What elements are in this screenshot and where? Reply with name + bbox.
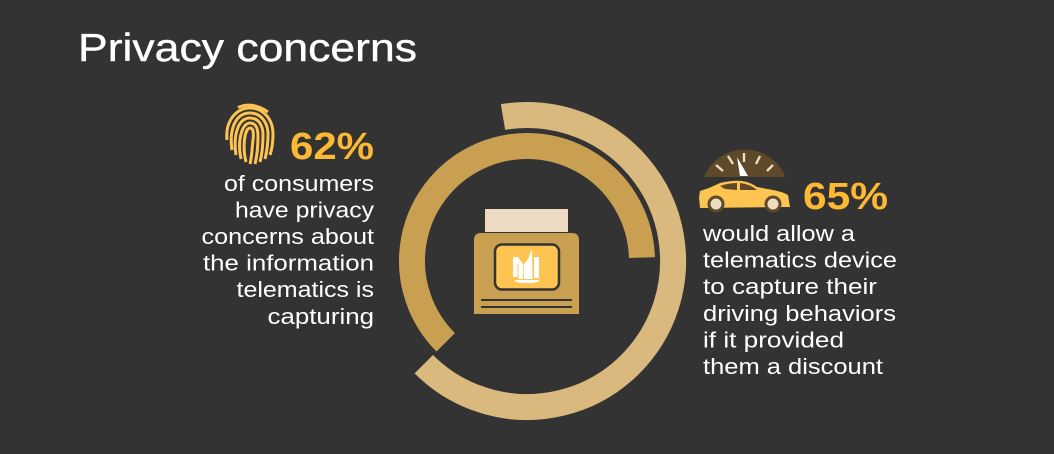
stat: 65%: 65% — [803, 176, 888, 218]
icon: speedometer — [704, 150, 786, 177]
text block: consumers privacy concerns — [202, 171, 374, 329]
text block: discount: to capture their — [703, 274, 877, 299]
text block: discount: driving behaviors — [703, 301, 896, 326]
text block: consumers privacy concerns: telematics is — [236, 277, 374, 302]
text block: discount: if it provided — [703, 328, 844, 352]
text block: consumers privacy concerns: of consumers — [224, 171, 374, 196]
icon: fingerprint — [227, 105, 273, 164]
text block: consumers privacy concerns: the information — [203, 250, 374, 276]
text block: discount — [702, 221, 897, 379]
icon: telematics device — [474, 209, 579, 314]
text block: consumers privacy concerns: have privacy — [235, 198, 374, 222]
text block: discount: them a discount — [703, 354, 883, 379]
text block: discount: would allow a — [702, 221, 856, 246]
text block: consumers privacy concerns: concerns about — [202, 224, 374, 249]
chart: outer ring 65% — [424, 115, 673, 407]
title: Privacy concerns — [78, 27, 417, 70]
text block: consumers privacy concerns: capturing — [268, 304, 374, 329]
text block: discount: telematics device — [703, 248, 897, 272]
stat: 62%: 62% — [290, 126, 374, 168]
chart: inner ring 62% — [412, 146, 642, 342]
icon: car — [699, 181, 790, 212]
